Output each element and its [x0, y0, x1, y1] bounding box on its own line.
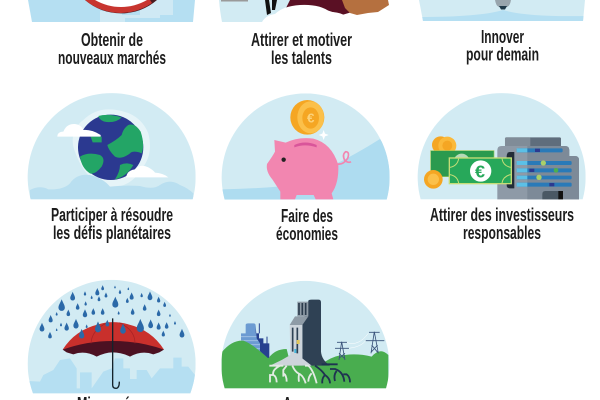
- illustration: planet with clouds: [28, 93, 196, 200]
- heading: attirer et motiver les talents: [251, 29, 352, 68]
- icon: tower: [270, 300, 330, 366]
- icon: gold coins: [432, 136, 456, 155]
- raindrops: [40, 285, 184, 338]
- heading: obtenir de nouveaux marchés: nouveaux marchés: [58, 47, 166, 68]
- illustration: rooted tower between hills: [222, 281, 390, 388]
- panel: attirer des investisseurs responsables: [418, 93, 586, 243]
- illustration: light bulb: [419, 0, 585, 22]
- icon: blue city: [241, 323, 269, 358]
- icon: front banknote with euro: [449, 158, 511, 184]
- heading: faire des économies: [276, 205, 338, 244]
- heading: attirer et motiver les talents: Attirer et motiver: [251, 29, 352, 50]
- icon: tower roots: [269, 364, 350, 383]
- illustration: people and cloud: [219, 0, 389, 22]
- heading: participer à résoudre les défis planétaires: [51, 204, 173, 243]
- illustration: piggy bank and coin: [222, 94, 390, 200]
- panel: attirer et motiver les talents: [219, 0, 389, 68]
- panel: innover pour demain: [419, 0, 585, 64]
- panel: faire des économies: [222, 94, 390, 240]
- heading: attirer et motiver les talents: les talents: [271, 47, 332, 68]
- panel: mieux gérer les risques: [28, 280, 196, 400]
- icon: globe: [78, 115, 143, 180]
- panel: participer à résoudre les défis planétaires: [28, 93, 196, 243]
- icon: back banknote: [431, 151, 494, 177]
- heading: attirer des investisseurs responsables: responsables: [463, 222, 541, 243]
- heading: obtenir de nouveaux marchés: Obtenir de: [81, 29, 143, 50]
- green hills: [222, 341, 388, 390]
- heading: innover pour demain: [466, 26, 539, 64]
- icon: front banknote with euro: €: [475, 162, 485, 182]
- icon: euro coin: [290, 100, 329, 140]
- city skyline: [28, 358, 195, 395]
- illustration: umbrella in the rain: [28, 280, 196, 394]
- illustration: banknotes and bank building: [418, 93, 586, 200]
- heading: participer à résoudre les défis planétaires: Participer à résoudre: [51, 204, 173, 225]
- heading: faire des économies: Faire des: [281, 205, 333, 226]
- icon: coin: [424, 170, 443, 189]
- heading: obtenir de nouveaux marchés: [58, 29, 166, 68]
- heading: innover pour demain: pour demain: [466, 44, 539, 64]
- raindrops in front of canopy: [79, 319, 144, 338]
- icon: pig: [267, 138, 351, 199]
- illustration: red ring over city: [28, 0, 195, 22]
- icon: red umbrella: [63, 318, 164, 388]
- panel: obtenir de nouveaux marchés: [28, 0, 195, 68]
- icon: power pylons: [335, 332, 384, 360]
- heading: innover pour demain: Innover: [481, 26, 524, 47]
- panel: assurer sa résilience: [222, 281, 390, 400]
- heading: faire des économies: économies: [276, 223, 338, 244]
- heading: participer à résoudre les défis planétaires: les défis planétaires: [53, 222, 171, 243]
- icon: euro coin: €: [307, 110, 315, 125]
- heading: attirer des investisseurs responsables: [430, 204, 574, 243]
- icon: clouds: [57, 124, 168, 177]
- icon: building: [497, 137, 579, 199]
